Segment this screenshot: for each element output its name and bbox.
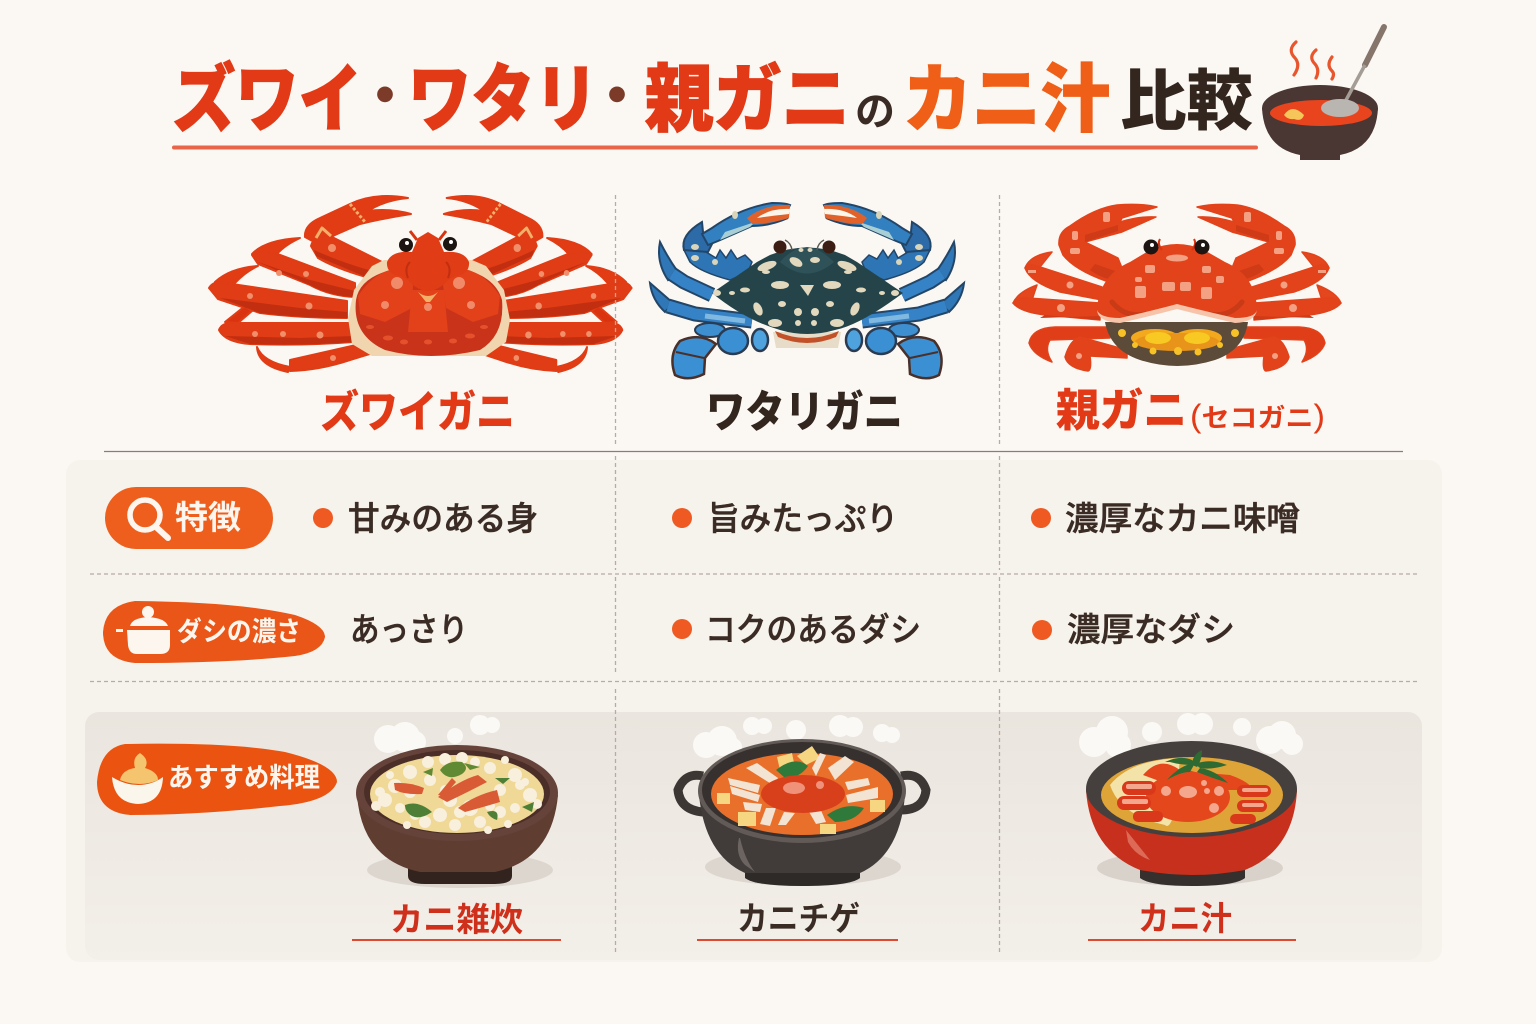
title: crab names <box>172 58 850 141</box>
dish name: crab soup: カニ汁 <box>1138 900 1232 937</box>
icon: snow crab <box>209 196 632 372</box>
title <box>172 58 1253 141</box>
title: crab names: ワタリ <box>408 58 598 141</box>
title: crab names: ・ <box>589 65 645 128</box>
table panel <box>66 460 1442 962</box>
row 2: broth richness: あっさり <box>350 611 468 648</box>
title: particle: の <box>855 90 895 134</box>
heading: female crab <box>1056 385 1325 436</box>
title: crab names: ズワイ <box>172 58 362 141</box>
heading: female crab: (セコガニ ) <box>1190 398 1325 434</box>
icon: pot <box>116 606 170 654</box>
dish name: crab jjigae: カニチゲ <box>737 900 860 937</box>
row 2: broth richness <box>350 611 1235 648</box>
row 1: features: 甘みのある身 <box>348 500 538 537</box>
icon: crab rice porridge bowl <box>356 715 558 888</box>
row 1: features <box>313 500 1300 537</box>
heading: snow crab: ズワイガニ <box>320 387 515 437</box>
row 2: broth richness: 濃厚なダシ <box>1067 611 1235 648</box>
row 2: broth richness: コクのあるダシ <box>705 611 921 648</box>
row 1: features: 旨みたっぷり <box>708 500 898 537</box>
table grid lines <box>90 195 1418 955</box>
dish name: crab porridge: カニ雑炊 <box>390 901 523 938</box>
row label: recommended dishes <box>97 744 337 815</box>
title underline <box>172 146 1258 150</box>
row 1: features: 濃厚なカニ味噌 <box>1065 500 1300 537</box>
row label: features <box>105 487 273 549</box>
icon: blue swimming crab <box>650 203 964 378</box>
icon: small bowl <box>112 753 163 804</box>
title: crab names: 親ガニ <box>645 58 850 141</box>
panel: recommended dishes band <box>85 712 1422 960</box>
title: comparison: 比較 <box>1120 64 1253 138</box>
title: kani-jiru: カニ汁 <box>903 58 1110 141</box>
row label: broth richness: ダシの濃さ <box>177 616 301 647</box>
icon: crab soup bowl <box>1079 713 1303 886</box>
row label: recommended dishes: あすすめ料理 <box>168 763 320 793</box>
icon: magnifier <box>130 500 168 538</box>
heading: blue swimming crab: ワタリガニ <box>706 388 903 437</box>
icon: female crab with roe <box>1013 204 1341 371</box>
icon: crab stew pot <box>678 715 926 886</box>
icon: soup bowl with ladle <box>1262 27 1384 160</box>
row label: broth richness <box>103 601 325 663</box>
heading: female crab: 親ガニ <box>1056 385 1187 436</box>
title: crab names: ・ <box>357 65 413 128</box>
row label: features: 特徴 <box>175 499 241 536</box>
